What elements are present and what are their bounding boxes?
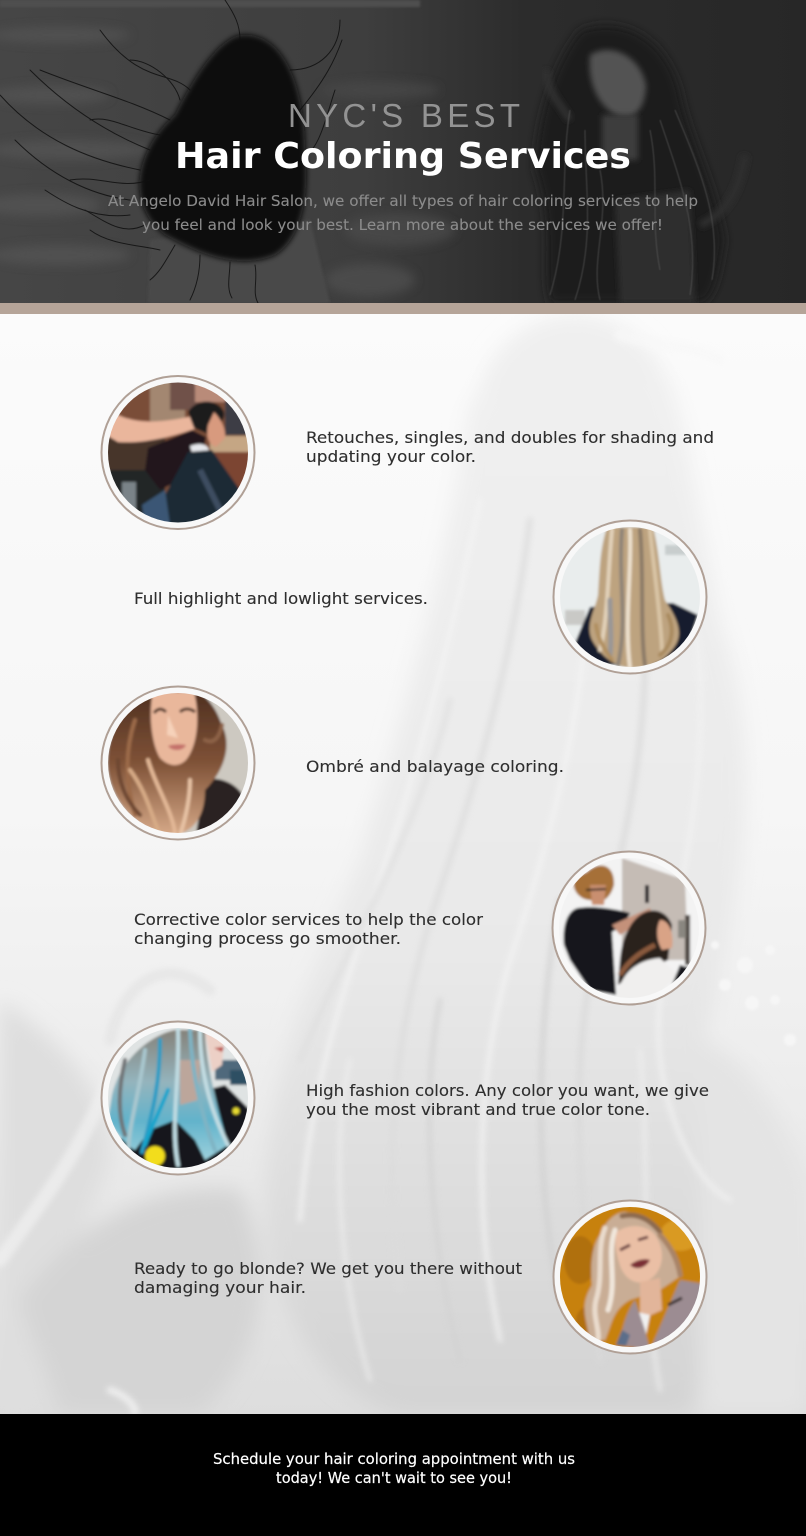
service 4: corrective color photo xyxy=(550,850,710,1010)
body section background: woman's hair photo xyxy=(0,314,806,1414)
service 2 text: Full highlight and lowlight services. xyxy=(134,589,428,608)
kicker: NYC's best: NYC'S BEST xyxy=(288,97,520,134)
service 5 text xyxy=(306,1081,709,1119)
right woman hair and figure xyxy=(535,25,745,303)
intro paragraph xyxy=(108,192,698,234)
service 4 text xyxy=(134,910,483,948)
service 6 text: damaging your hair. xyxy=(134,1278,306,1297)
service 3: ombre photo xyxy=(100,685,260,845)
service 5 text: you the most vibrant and true color tone. xyxy=(306,1100,650,1119)
service 1 text: Retouches, singles, and doubles for shading and xyxy=(306,428,714,447)
service 4 text: changing process go smoother. xyxy=(134,929,401,948)
service 6: blonde photo xyxy=(554,1200,710,1355)
service 5 text: High fashion colors. Any color you want, we give xyxy=(306,1081,709,1100)
intro paragraph: At Angelo David Hair Salon, we offer all types of hair coloring services to help xyxy=(108,192,698,210)
left woman hair xyxy=(0,0,342,303)
intro paragraph: you feel and look your best. Learn more about the services we offer! xyxy=(142,216,663,234)
service 6 text xyxy=(134,1259,522,1297)
service 1: retouches photo xyxy=(100,375,260,535)
footer panel xyxy=(0,1414,806,1536)
service 4 text: Corrective color services to help the color xyxy=(134,910,483,929)
header text block xyxy=(108,97,698,234)
footer call to action xyxy=(213,1450,575,1487)
service 6 text: Ready to go blonde? We get you there without xyxy=(134,1259,522,1278)
service 3 text: Ombré and balayage coloring. xyxy=(306,757,564,776)
taupe divider band xyxy=(0,303,806,314)
service 1 text: updating your color. xyxy=(306,447,476,466)
service 1 text xyxy=(306,428,714,466)
header panel: black and white photo background xyxy=(0,0,806,303)
footer call to action: Schedule your hair coloring appointment with us xyxy=(213,1450,575,1468)
heading: hair coloring services: Hair Coloring Services xyxy=(175,136,631,177)
left woman sweater xyxy=(227,222,328,302)
service 2: highlights photo xyxy=(554,520,706,674)
footer call to action: today! We can't wait to see you! xyxy=(276,1469,512,1487)
sea texture xyxy=(0,27,455,296)
service 5: fashion color photo xyxy=(100,1020,260,1180)
